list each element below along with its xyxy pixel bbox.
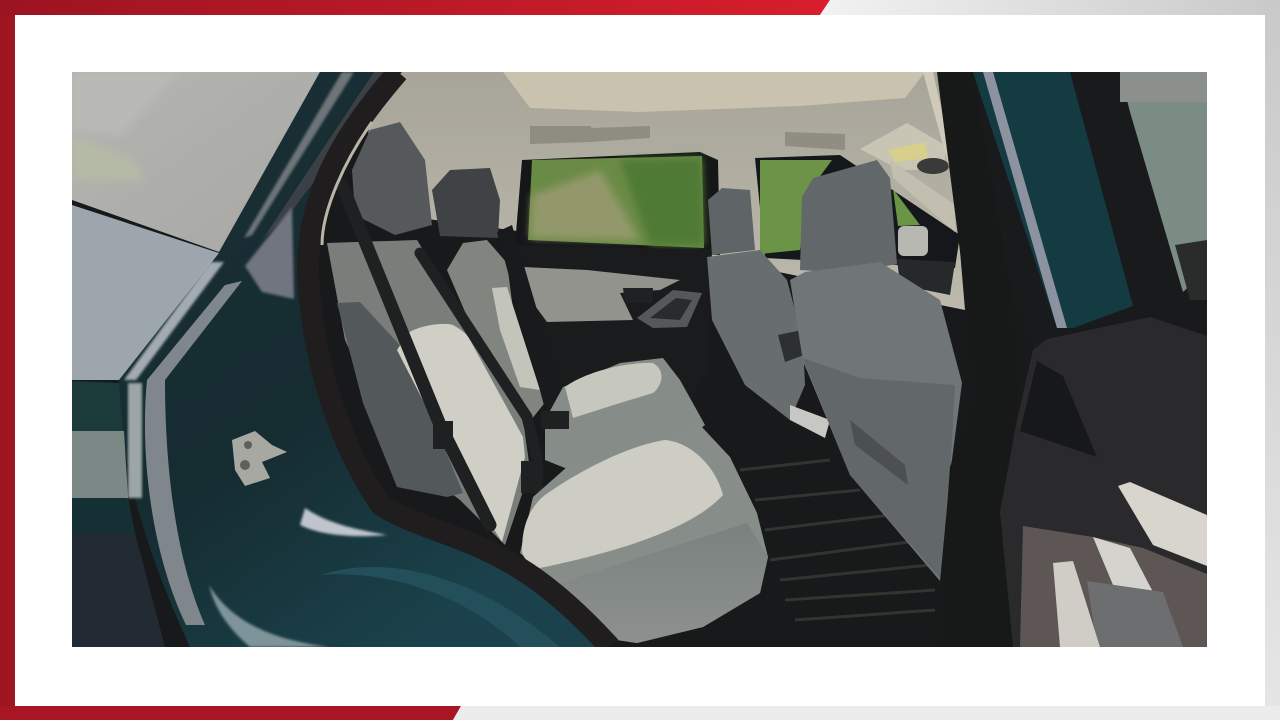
inner pale trim <box>322 122 372 245</box>
near front seat <box>790 160 962 581</box>
door latch <box>232 431 287 486</box>
sill reflections <box>209 508 560 647</box>
body crease highlights <box>145 281 242 625</box>
right door trim <box>1000 317 1207 647</box>
far front seat <box>707 188 830 438</box>
rear seat backrest far <box>432 168 544 418</box>
seat belt <box>342 185 568 525</box>
rear door frame seal <box>308 72 610 647</box>
lavender inner panel <box>245 207 294 299</box>
headliner <box>360 72 965 310</box>
car body: glass panel <box>72 72 320 252</box>
floor mat <box>650 430 940 647</box>
rear door trim <box>524 248 712 328</box>
quarter window <box>755 155 960 295</box>
cabin background <box>72 72 1035 647</box>
rear seat main base <box>520 425 768 643</box>
rear seat far base <box>545 358 705 470</box>
rear door window <box>515 152 720 255</box>
photo: car rear seat interior <box>72 72 1207 647</box>
teal door pillar <box>119 72 610 647</box>
right pillar trim <box>924 72 1133 511</box>
light upper body panel <box>72 205 219 380</box>
vertical body stripe <box>128 383 142 498</box>
right door window <box>1120 72 1207 300</box>
pillar highlight <box>244 72 354 238</box>
rear seat backrest near <box>327 122 530 545</box>
teal lower body panel <box>72 381 123 431</box>
